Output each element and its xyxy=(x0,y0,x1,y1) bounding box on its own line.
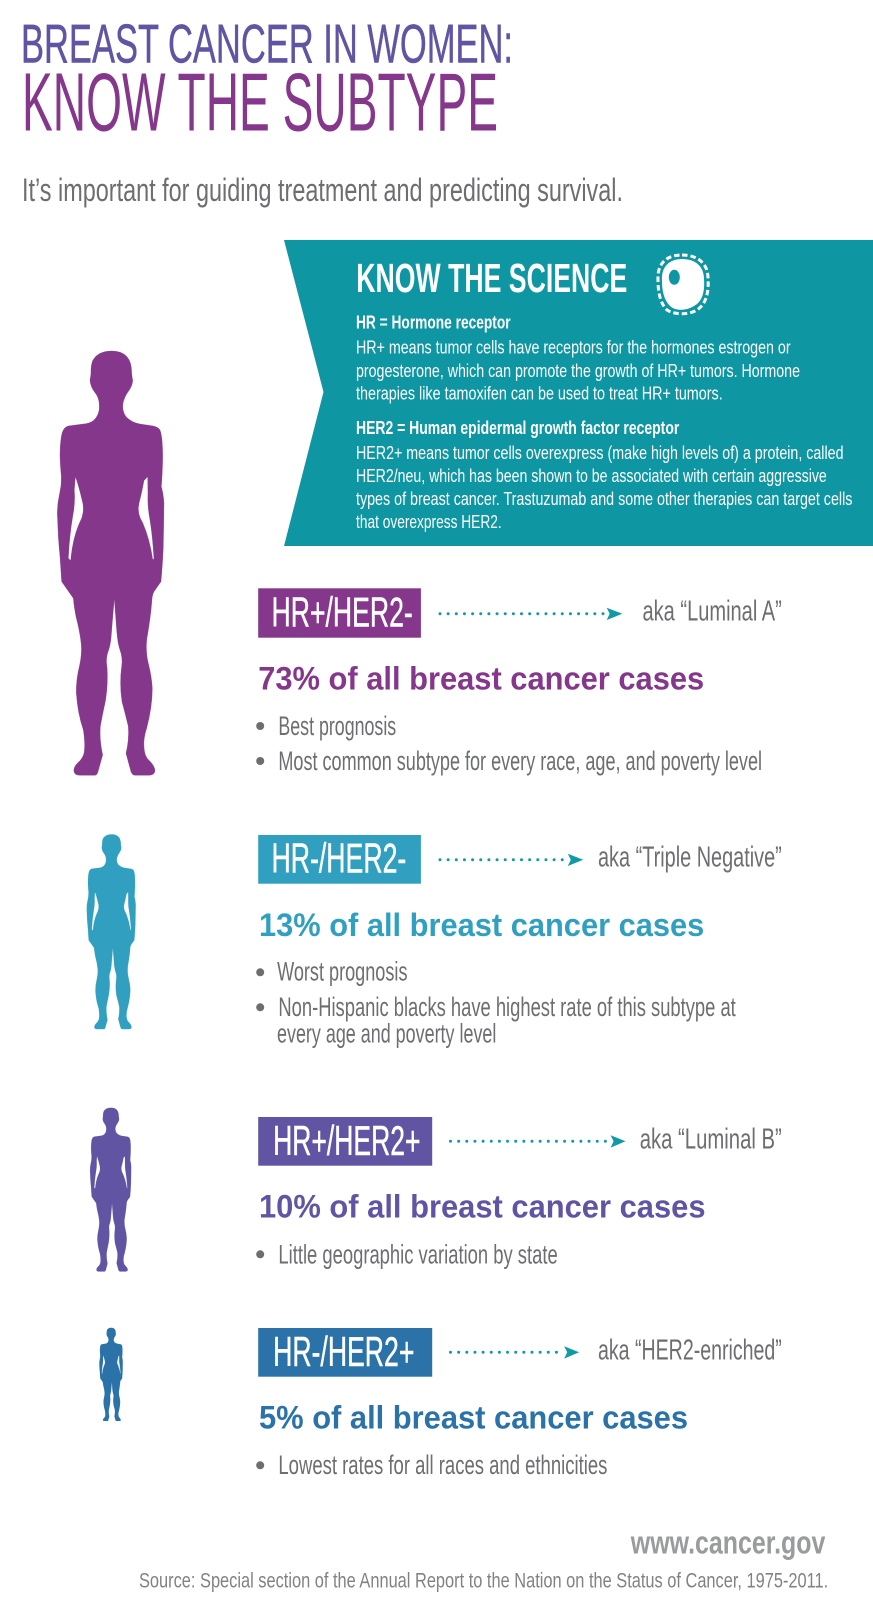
badge: HR-/HER2+ xyxy=(273,1328,414,1375)
bullet list xyxy=(256,1239,558,1269)
section: HR-/HER2+ xyxy=(256,1328,782,1480)
bullet list xyxy=(256,711,762,776)
arrow xyxy=(440,854,583,866)
alias label: aka “Triple Negative” xyxy=(598,842,782,874)
badge xyxy=(258,588,421,638)
subtitle: It’s important for guiding treatment and predicting survival. xyxy=(22,172,623,208)
bullet list xyxy=(256,957,736,1049)
badge xyxy=(258,1328,432,1377)
figure: cyan silhouette xyxy=(87,834,136,1029)
arrow xyxy=(450,1135,626,1148)
text block: HR definition: therapies like tamoxifen can be used to treat HR+ tumors. xyxy=(356,383,723,403)
statistic: 5% of all breast cancer cases xyxy=(259,1399,688,1435)
text block: HER2 definition: that overexpress HER2. xyxy=(356,512,502,532)
badge xyxy=(258,835,421,884)
section: HR-/HER2- xyxy=(256,835,782,1049)
section: HR+/HER2- xyxy=(256,588,782,776)
text block: HER2 definition: HER2 = Human epidermal growth factor receptor xyxy=(356,418,679,438)
alias label: aka “Luminal B” xyxy=(640,1123,782,1155)
title: KNOW THE SUBTYPE xyxy=(22,55,498,148)
bullet list: Worst prognosis xyxy=(277,957,408,987)
alias label: aka “Luminal A” xyxy=(642,596,782,628)
figure: large purple silhouette xyxy=(57,351,164,775)
section: HR+/HER2+ xyxy=(256,1117,782,1269)
text block: HR definition xyxy=(356,313,800,403)
figure: small blue silhouette xyxy=(99,1328,123,1421)
arrow xyxy=(450,1346,579,1359)
website: www.cancer.gov xyxy=(630,1524,826,1560)
bullet list: Little geographic variation by state xyxy=(278,1239,558,1269)
title xyxy=(21,12,513,148)
arrow xyxy=(440,608,622,620)
icon: cell xyxy=(658,255,708,314)
bullet list: every age and poverty level xyxy=(277,1019,496,1049)
bullet list: Lowest rates for all races and ethnicities xyxy=(278,1450,607,1480)
badge: HR+/HER2- xyxy=(272,589,413,636)
figure: indigo silhouette xyxy=(90,1108,131,1272)
badge: HR+/HER2+ xyxy=(273,1117,420,1164)
bullet list: Best prognosis xyxy=(278,711,396,741)
alias label: aka “HER2-enriched” xyxy=(598,1334,782,1366)
statistic: 73% of all breast cancer cases xyxy=(258,660,704,696)
badge: HR-/HER2- xyxy=(272,835,406,882)
bullet list xyxy=(256,1450,607,1480)
badge xyxy=(258,1117,432,1166)
panel heading: KNOW THE SCIENCE xyxy=(356,255,627,301)
statistic: 13% of all breast cancer cases xyxy=(259,907,704,943)
statistic: 10% of all breast cancer cases xyxy=(259,1188,706,1224)
text block: HR definition: HR = Hormone receptor xyxy=(356,313,511,333)
panel: know the science xyxy=(284,240,873,546)
text block: HER2 definition xyxy=(356,418,852,532)
title: BREAST CANCER IN WOMEN: xyxy=(21,12,513,74)
